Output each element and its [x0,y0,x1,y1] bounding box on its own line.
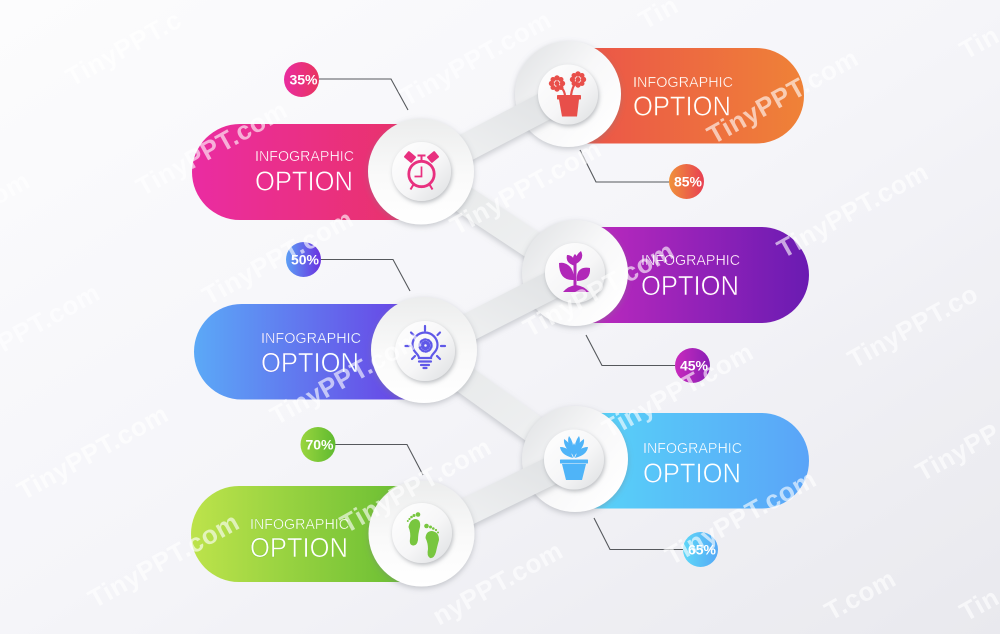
panel: orange option pill [540,48,804,144]
label: pink option: INFOGRAPHIC [255,148,354,165]
watermarks: TinyPPT.com [395,4,556,112]
icon: alarm clock [404,151,439,190]
badge: 65% [683,532,718,567]
watermarks: TinyPPT.com [445,133,606,241]
watermarks: T.com [819,563,901,626]
label: green option: INFOGRAPHIC [250,516,349,533]
label: orange option: INFOGRAPHIC [633,74,733,91]
watermarks: TinyPPT.com [702,42,863,150]
label: blue option [261,330,361,378]
badge: 65%: 65% [688,542,717,558]
label: blue option: INFOGRAPHIC [261,330,361,347]
watermarks: TinyPPT.com [131,94,292,202]
label: green option [250,516,349,563]
label: purple option: INFOGRAPHIC [641,252,740,269]
left-hand outer rings [368,118,477,586]
badge: 45%: 45% [680,358,709,374]
watermarks: TinyPPT.com [265,323,426,431]
label: purple option: OPTION [641,270,739,301]
badge: 50% [286,242,321,277]
icon: succulent in pot [560,436,588,480]
connectors running down to the right [421,171,575,459]
watermarks: TinyPPT.com [335,431,496,539]
icon: sprouting plant [559,251,590,292]
watermarks: TinyPPT.com [197,203,358,311]
inner icon discs [392,64,605,563]
watermarks: TinyPPT.co [842,278,983,374]
leader lines [319,79,683,550]
label: orange option: OPTION [633,90,731,122]
label: cyan option: OPTION [643,458,741,488]
label: orange option [633,74,733,122]
icon: light bulb with gear [406,326,445,368]
badge: 35%: 35% [289,72,318,88]
watermarks: TinyPPT.com [12,398,173,506]
label: cyan option: INFOGRAPHIC [643,440,742,457]
badge: 35% [284,62,319,97]
panel: cyan option pill [545,413,809,508]
watermarks: TinyPPT.com [660,463,821,571]
badge: 50%: 50% [291,252,320,268]
watermarks: TinyPPT.com [772,156,933,264]
watermarks: nyPPT.com [427,535,568,631]
label: blue option: OPTION [261,347,359,378]
label: purple option [641,252,740,301]
badge: 85% [669,164,704,199]
badge: 45% [675,348,710,383]
watermarks: TinyPPT.com [597,336,758,444]
icon: flower pot [549,71,586,116]
panel: pink option pill [192,124,452,220]
badge: 85%: 85% [674,174,703,190]
watermarks: TinyPPT.c [60,4,187,92]
icon: footprints [407,512,439,558]
label: green option: OPTION [250,532,348,563]
connectors running up to the right [421,94,575,534]
badge: 70% [300,427,336,462]
panel: purple option pill [545,227,809,323]
panel: green option pill [191,486,451,582]
label: cyan option [643,440,742,488]
badge: 70%: 70% [305,436,334,452]
right-hand outer rings [515,41,628,512]
label: pink option: OPTION [255,166,353,196]
watermarks: TinyPPT.com [83,506,244,614]
label: pink option [255,148,354,196]
panel: blue option pill [194,304,454,400]
watermarks: TinyPPT.com [518,235,679,343]
